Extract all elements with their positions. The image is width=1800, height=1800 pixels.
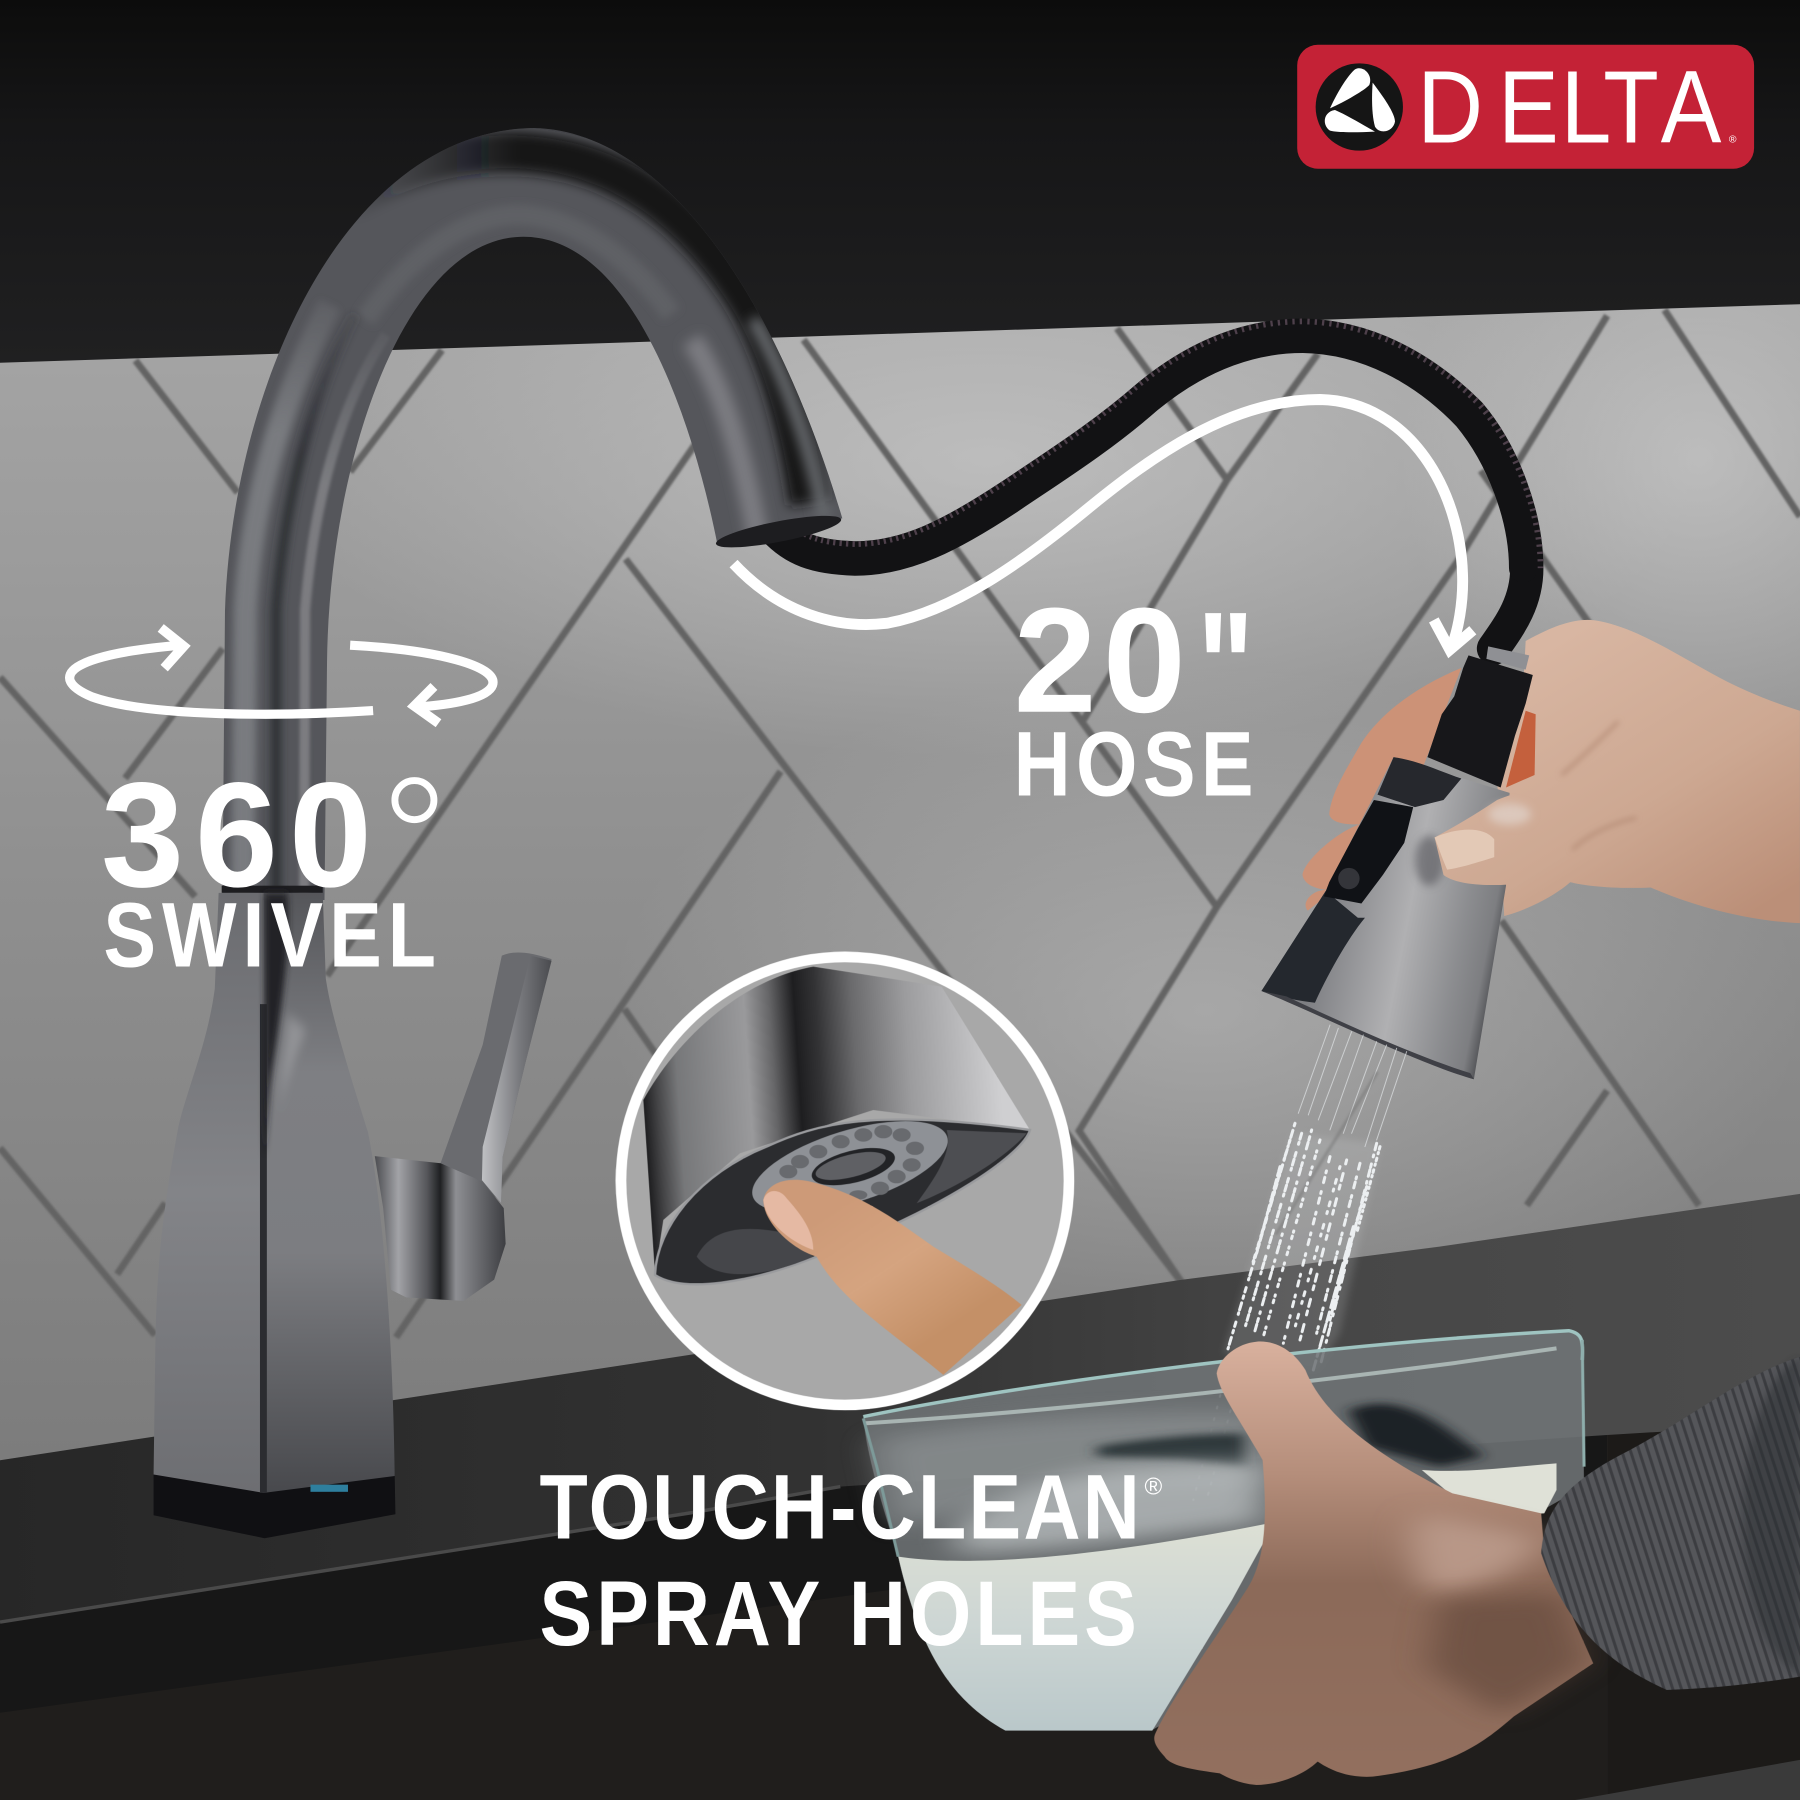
inset background [621, 957, 1069, 1405]
bowl reflections [877, 1412, 1269, 1527]
label: 20 inch hose [1014, 577, 1254, 816]
label: 20 inch hose: HOSE [1014, 713, 1254, 816]
inset ring [621, 957, 1069, 1405]
logo emblem [1316, 63, 1403, 151]
spray button panel [1324, 800, 1413, 904]
fingertip [763, 1180, 1022, 1375]
hand highlight [1411, 1513, 1538, 1593]
label: 20 inch hose: " [1197, 579, 1254, 755]
arrow: hose reach [734, 399, 1473, 650]
hose collar [1486, 646, 1529, 670]
label: 360 degree swivel: 360 [101, 751, 372, 918]
degree sign [395, 781, 434, 820]
cone top reflection [1377, 757, 1461, 807]
bowl glass [863, 1331, 1584, 1730]
spray disc [752, 1121, 948, 1208]
hand holding bowl [1154, 1341, 1800, 1785]
label: touch-clean spray holes: TOUCH-CLEAN [540, 1456, 1140, 1559]
Delta logo badge: ® [1729, 134, 1737, 145]
hand shadow [1428, 1593, 1587, 1717]
lever handle [440, 952, 552, 1203]
water droplets [1193, 1123, 1380, 1500]
touch indicator [310, 1485, 348, 1492]
left facet [154, 893, 264, 1493]
Delta logo badge [1297, 45, 1754, 169]
bowl rim [863, 1331, 1583, 1417]
thumb [1435, 721, 1658, 885]
swivel arrows [70, 628, 493, 723]
thumb crease [1561, 721, 1636, 850]
thumb shadow [1415, 836, 1444, 886]
inset: touch-clean spray holes [621, 957, 1069, 1405]
dark shelf above backsplash [0, 0, 1800, 363]
fingers behind the head [1302, 668, 1461, 911]
back of hand [1497, 620, 1800, 923]
spout underside [655, 1119, 1030, 1284]
center seam [260, 1004, 267, 1493]
Delta logo badge: DELTA [1417, 49, 1722, 165]
countertop [0, 1194, 1800, 1800]
cone rim [1261, 991, 1474, 1079]
water stream shadow [1277, 1073, 1377, 1233]
gap shadow [1506, 711, 1536, 787]
fingernail [763, 1191, 813, 1250]
label: 360 degree swivel [101, 751, 436, 987]
thumbnail [1435, 830, 1494, 870]
water streams [1298, 1025, 1407, 1147]
right facet [264, 893, 395, 1493]
hand holding spray head [1261, 620, 1800, 1079]
batter in bowl [898, 1523, 1269, 1731]
pull-down hose [771, 335, 1527, 649]
knuckle highlight [1488, 804, 1531, 825]
glass mixing bowl [863, 1331, 1584, 1731]
label: 20 inch hose: 20 [1014, 577, 1186, 744]
spout head [643, 967, 1030, 1273]
swivel collar [222, 886, 323, 893]
faucet arched spout [222, 128, 843, 900]
center aerator [812, 1148, 896, 1186]
faucet body [154, 886, 552, 1538]
water mist [1223, 1133, 1380, 1370]
spray nozzles [779, 1125, 924, 1200]
label: touch-clean spray holes: SPRAY HOLES [540, 1562, 1137, 1665]
spray water [1193, 1025, 1407, 1500]
label: 360 degree swivel: SWIVEL [103, 884, 436, 987]
touch base [154, 1472, 395, 1538]
label: touch-clean spray holes [540, 1456, 1163, 1665]
faucet [154, 128, 843, 1538]
label: touch-clean spray holes: ® [1145, 1474, 1163, 1501]
chrome cone [1261, 757, 1510, 1079]
cone left reflection [1261, 891, 1365, 1003]
handle hub [375, 1156, 506, 1301]
sleeve [1541, 1357, 1800, 1690]
tiled wall [0, 161, 1800, 1492]
